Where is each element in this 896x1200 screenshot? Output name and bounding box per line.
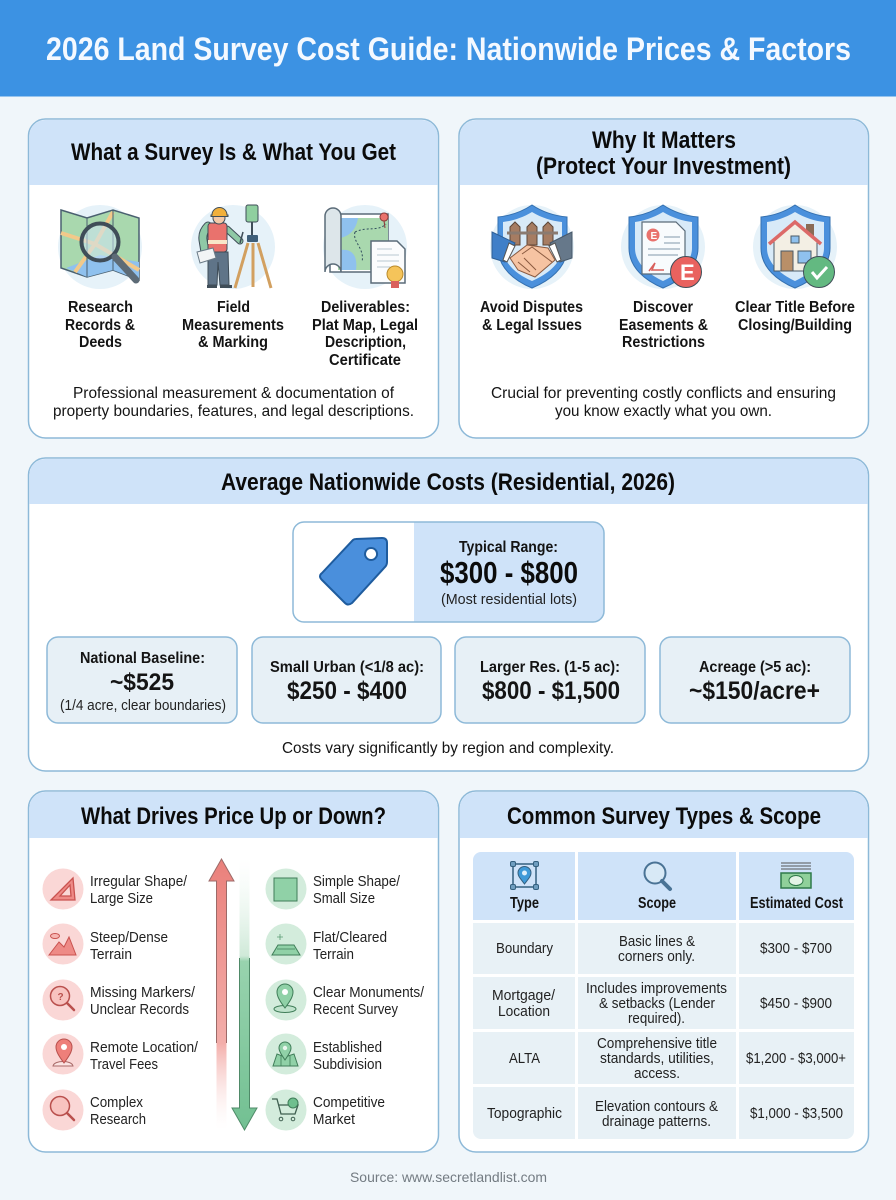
row: alta: access. (634, 1065, 680, 1082)
item: competitive market (266, 1090, 385, 1130)
heading: why it matters: Why It Matters (592, 127, 736, 154)
note: costs vary: Costs vary significantly by region and complexity. (282, 740, 614, 757)
row: topographic: drainage patterns. (602, 1113, 711, 1130)
item: remote location: Remote Location/ (90, 1039, 199, 1056)
row: mortgage: $450 - $900 (760, 995, 832, 1012)
icon: price tag (320, 538, 387, 604)
table header row (473, 852, 854, 920)
table: survey types (473, 852, 854, 1139)
heading: what drives price: What Drives Price Up or Down? (81, 803, 386, 830)
card: national baseline: ~$525 (110, 669, 174, 696)
item: missing markers: ? (58, 992, 64, 1003)
row: boundary: Basic lines & (619, 933, 695, 950)
item: steep terrain: Steep/Dense (90, 929, 168, 946)
item: irregular shape: Large Size (90, 890, 153, 907)
icon: shield house (753, 205, 837, 289)
row: alta: $1,200 - $3,000+ (746, 1050, 846, 1067)
item: competitive market: Market (313, 1111, 356, 1128)
label: field measurements: & Marking (198, 334, 268, 351)
item: flat terrain: Terrain (313, 946, 354, 963)
item: irregular shape: Irregular Shape/ (90, 873, 188, 890)
item: missing markers: Unclear Records (90, 1001, 189, 1018)
label: clear title: Clear Title Before (735, 299, 855, 316)
item: established subdivision: Established (313, 1039, 382, 1056)
heading: average costs: Average Nationwide Costs (Residential, 2026) (221, 469, 675, 496)
label: discover easements: Easements & (619, 317, 708, 334)
label: deliverables: Description, (325, 334, 406, 351)
row: mortgage: Location (498, 1003, 550, 1020)
item: clear monuments: Clear Monuments/ (313, 984, 425, 1001)
label: research records: Deeds (79, 334, 122, 351)
item: irregular shape (42, 868, 188, 910)
heading: survey types: Common Survey Types & Scope (507, 803, 821, 830)
icon: map with magnifier (58, 205, 142, 289)
item: steep terrain (42, 924, 168, 964)
card: larger residential: Larger Res. (1-5 ac): (480, 659, 620, 676)
label: clear title: Closing/Building (738, 317, 852, 334)
card: larger residential (455, 637, 645, 723)
label: research records: Research (68, 299, 133, 316)
table header row: Scope (638, 895, 676, 912)
row: mortgage (473, 977, 854, 1029)
row: alta: ALTA (509, 1050, 540, 1067)
item: flat terrain (266, 924, 387, 964)
row: boundary: corners only. (618, 948, 695, 965)
item: flat terrain: Flat/Cleared (313, 929, 387, 946)
label: clear title (735, 299, 855, 334)
icon: shield document easement (621, 205, 705, 289)
label: field measurements: Field (217, 299, 250, 316)
card: acreage (660, 637, 850, 723)
heading: why it matters (536, 127, 791, 180)
item: remote location (42, 1034, 199, 1074)
item: simple shape: Small Size (313, 890, 375, 907)
item: complex research (42, 1090, 146, 1130)
label: deliverables: Plat Map, Legal (312, 317, 418, 334)
arrow: price up (209, 859, 234, 1130)
card: larger residential: $800 - $1,500 (482, 677, 620, 705)
item: simple shape (266, 868, 401, 910)
row: alta: standards, utilities, (600, 1050, 714, 1067)
icon: cost (781, 863, 811, 888)
item: clear monuments (266, 980, 425, 1020)
item: clear monuments: Recent Survey (313, 1001, 398, 1018)
label: deliverables: Certificate (329, 352, 401, 369)
description text: Professional measurement & documentation of (73, 385, 395, 402)
row: topographic: Elevation contours & (595, 1098, 718, 1115)
source footer: Source: www.secretlandlist.com (350, 1169, 547, 1185)
label: avoid disputes (480, 299, 583, 334)
row: topographic: Topographic (487, 1105, 562, 1122)
card: acreage: Acreage (>5 ac): (699, 659, 811, 676)
card: acreage: ~$150/acre+ (689, 677, 820, 705)
item: established subdivision (266, 1034, 382, 1074)
row: alta: Comprehensive title (597, 1035, 717, 1052)
icon: shield document easement: E (680, 260, 695, 285)
row: mortgage: required). (628, 1010, 685, 1027)
typical range text: (Most residential lots) (441, 591, 577, 608)
icon: plat map and certificate (323, 205, 407, 289)
panel: common survey types (459, 791, 868, 1152)
heading: what a survey is: What a Survey Is & What You Get (71, 139, 396, 166)
label: deliverables (312, 299, 418, 369)
panel: what a survey is (28, 119, 438, 438)
heading: why it matters: (Protect Your Investment) (536, 153, 791, 180)
card: national baseline (47, 637, 237, 723)
typical range text (440, 539, 578, 608)
label: field measurements (182, 299, 284, 351)
table header row: Type (510, 895, 539, 912)
typical range text: $300 - $800 (440, 555, 578, 590)
row: mortgage: Includes improvements (586, 980, 727, 997)
description text (53, 385, 414, 420)
row: mortgage: Mortgage/ (492, 987, 556, 1004)
label: avoid disputes: Avoid Disputes (480, 299, 583, 316)
icon: surveyor with tripod (191, 205, 275, 289)
label: research records (65, 299, 135, 351)
typical range text: Typical Range: (459, 539, 558, 556)
item: complex research: Complex (90, 1094, 143, 1111)
label: avoid disputes: & Legal Issues (482, 317, 582, 334)
item: simple shape: Simple Shape/ (313, 873, 401, 890)
item: established subdivision: Subdivision (313, 1056, 382, 1073)
icon: type (510, 862, 538, 890)
label: deliverables: Deliverables: (321, 299, 410, 316)
typical range card (293, 522, 604, 622)
row: topographic (473, 1087, 854, 1139)
item: missing markers: Missing Markers/ (90, 984, 196, 1001)
label: discover easements (619, 299, 708, 351)
row: mortgage: & setbacks (Lender (599, 995, 715, 1012)
description text: you know exactly what you own. (555, 403, 772, 420)
card: national baseline: National Baseline: (80, 650, 205, 667)
panel: average nationwide costs (28, 458, 868, 771)
row: boundary (473, 923, 854, 974)
description text (491, 385, 836, 420)
card: national baseline: (1/4 acre, clear boundaries) (60, 697, 226, 714)
label: field measurements: Measurements (182, 317, 284, 334)
icon: scope (644, 862, 670, 889)
label: research records: Records & (65, 317, 135, 334)
panel: why it matters (459, 119, 868, 438)
card: small urban (252, 637, 441, 723)
row: boundary: Boundary (496, 940, 553, 957)
icon: shield handshake (490, 205, 574, 289)
arrow: price down (232, 858, 257, 1130)
label: discover easements: Discover (633, 299, 693, 316)
row: topographic: $1,000 - $3,500 (750, 1105, 843, 1122)
card: small urban: $250 - $400 (287, 677, 407, 705)
panel: what drives price (28, 791, 438, 1152)
item: remote location: Travel Fees (90, 1056, 158, 1073)
description text: Crucial for preventing costly conflicts and ensuring (491, 385, 836, 402)
card: small urban: Small Urban (<1/8 ac): (270, 659, 424, 676)
item: missing markers (42, 980, 196, 1020)
description text: property boundaries, features, and legal descriptions. (53, 403, 414, 420)
table header row: Estimated Cost (750, 895, 844, 912)
row: boundary: $300 - $700 (760, 940, 832, 957)
item: complex research: Research (90, 1111, 146, 1128)
icon: shield document easement: E (650, 231, 658, 242)
row: alta (473, 1032, 854, 1084)
item: competitive market: Competitive (313, 1094, 385, 1111)
title banner (0, 0, 896, 96)
label: discover easements: Restrictions (622, 334, 705, 351)
item: steep terrain: Terrain (90, 946, 132, 963)
